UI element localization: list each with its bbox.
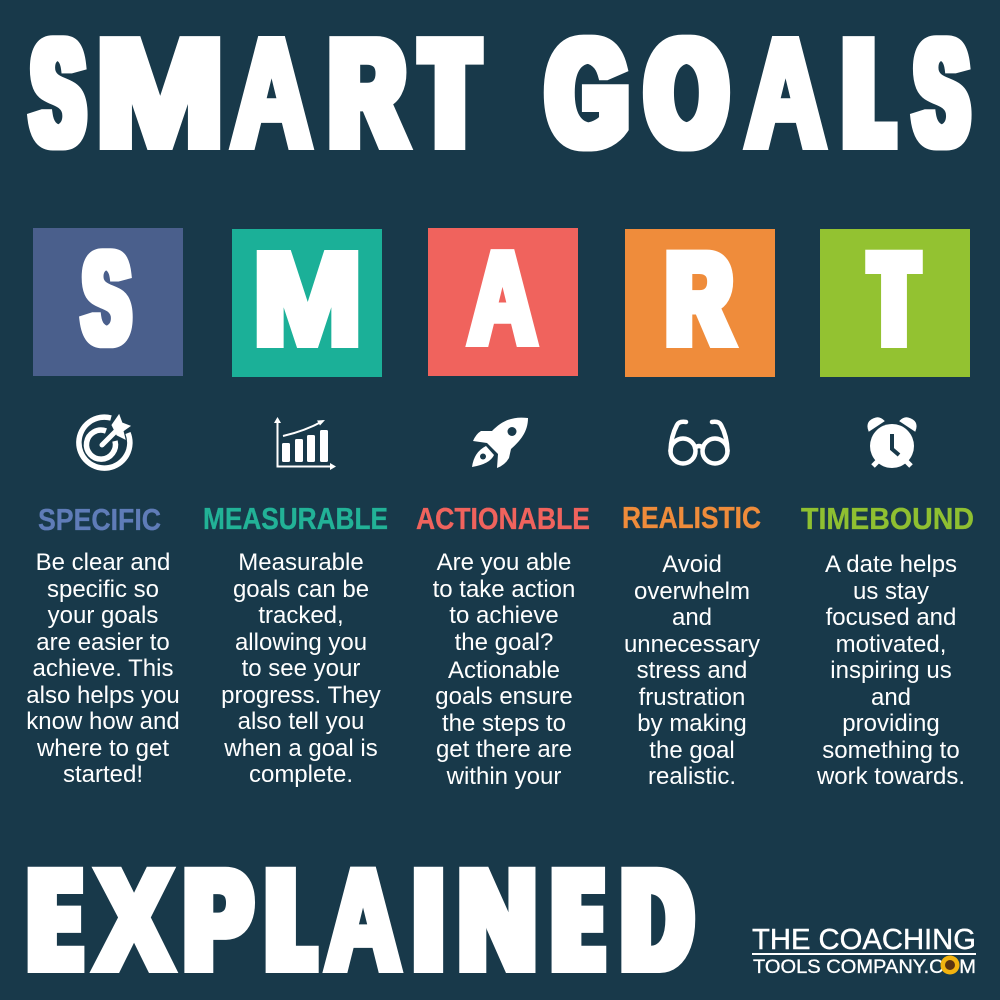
logo: The Coaching Tools Company: THE COACHING	[752, 924, 976, 956]
text block: specific description: are easier to	[36, 629, 170, 656]
text block: measurable description: when a goal is	[223, 735, 378, 762]
panel: S tile: S	[84, 225, 129, 371]
heading: EXPLAINED: D	[623, 844, 691, 997]
text block: measurable description: tracked,	[258, 602, 344, 629]
title: SMART GOALS: A	[232, 7, 311, 179]
text block: specific description: know how and	[26, 708, 180, 735]
panel: T tile: T	[872, 228, 916, 371]
logo: The Coaching Tools Company: TOOLS COMPANY.COM	[753, 957, 976, 978]
text block: timebound description: A date helps	[825, 551, 957, 578]
text block: realistic description: frustration	[639, 684, 745, 711]
heading: ACTIONABLE: ACTIONABLE	[416, 501, 590, 536]
panel: R tile: R	[667, 228, 732, 371]
heading: SPECIFIC: SPECIFIC	[38, 502, 161, 537]
heading: EXPLAINED: X	[98, 844, 170, 997]
text block: actionable description: within your	[446, 763, 561, 790]
text block: specific description	[26, 549, 180, 788]
panel: R tile	[625, 228, 775, 377]
text block: realistic description	[624, 551, 760, 790]
text block: actionable description: the goal?	[455, 629, 553, 656]
title: SMART GOALS: S	[32, 8, 83, 176]
heading: EXPLAINED: I	[411, 844, 446, 997]
panel: A tile	[428, 224, 578, 376]
text block: actionable description: Actionable	[448, 657, 560, 684]
text block: measurable description: goals can be	[233, 576, 369, 603]
heading: REALISTIC: REALISTIC	[622, 500, 761, 535]
heading: EXPLAINED: P	[185, 844, 251, 997]
text block: realistic description: unnecessary	[624, 631, 760, 658]
text block: realistic description: overwhelm	[634, 578, 750, 605]
text block: actionable description: Are you able	[437, 549, 571, 576]
text block: specific description: your goals	[48, 602, 158, 629]
panel: T tile	[820, 228, 970, 377]
title: SMART GOALS: O	[647, 11, 726, 176]
heading: TIMEBOUND: TIMEBOUND	[801, 501, 974, 536]
text block: actionable description: get there are	[436, 736, 572, 763]
text block: measurable description	[221, 549, 381, 788]
text block: measurable description: Measurable	[238, 549, 364, 576]
text block: realistic description: and	[672, 604, 712, 631]
text block: realistic description: the goal	[649, 737, 735, 764]
title: SMART GOALS: A	[746, 7, 825, 179]
title: SMART GOALS: M	[96, 11, 224, 176]
text block: measurable description: complete.	[249, 761, 353, 788]
heading: MEASURABLE: MEASURABLE	[203, 501, 388, 536]
text block: specific description: also helps you	[26, 682, 180, 709]
title: SMART GOALS	[32, 7, 967, 179]
icon: target	[79, 415, 130, 468]
heading: EXPLAINED: A	[326, 841, 400, 1000]
text block: timebound description	[816, 551, 965, 790]
text block: measurable description: also tell you	[238, 708, 364, 735]
panel: S tile	[33, 225, 183, 376]
icon: bar chart	[274, 417, 336, 470]
text block: timebound description: work towards.	[816, 763, 965, 790]
text block: timebound description: providing	[842, 710, 940, 737]
icon: rocket	[472, 418, 528, 468]
text block: specific description: where to get	[36, 735, 169, 762]
logo: The Coaching Tools Company	[752, 924, 976, 978]
text block: specific description: specific so	[47, 576, 159, 603]
text block: timebound description: us stay	[853, 578, 929, 605]
icon: alarm clock	[868, 418, 916, 468]
text block: realistic description: stress and	[637, 657, 747, 684]
heading: EXPLAINED: N	[459, 844, 536, 997]
icon: glasses	[670, 422, 728, 464]
text block: actionable description: goals ensure	[435, 683, 573, 710]
text block: timebound description: something to	[822, 737, 960, 764]
heading: EXPLAINED: E	[33, 844, 77, 997]
text block: specific description: Be clear and	[36, 549, 170, 576]
title: SMART GOALS: R	[331, 11, 404, 176]
heading: EXPLAINED	[33, 841, 691, 1000]
icon: sunflower	[940, 956, 960, 974]
text block: realistic description: Avoid	[662, 551, 722, 578]
text block: measurable description: progress. They	[221, 682, 381, 709]
text block: timebound description: and	[871, 684, 911, 711]
title: SMART GOALS: G	[548, 11, 627, 176]
text block: measurable description: to see your	[242, 655, 360, 682]
text block: specific description: achieve. This	[33, 655, 173, 682]
text block: realistic description: by making	[637, 710, 747, 737]
text block: timebound description: motivated,	[836, 631, 946, 658]
text block: actionable description: to take action	[433, 576, 575, 603]
text block: timebound description: inspiring us	[830, 657, 952, 684]
text block: actionable description: the steps to	[442, 710, 566, 737]
text block: actionable description	[433, 549, 575, 790]
text block: actionable description: to achieve	[449, 602, 559, 629]
heading: EXPLAINED: L	[272, 844, 310, 997]
text block: timebound description: focused and	[826, 604, 956, 631]
text block: realistic description: realistic.	[648, 763, 736, 790]
panel: M tile	[232, 228, 382, 377]
panel: M tile: M	[253, 228, 362, 371]
panel: A tile: A	[468, 224, 536, 372]
title: SMART GOALS: T	[425, 11, 475, 176]
heading: EXPLAINED: E	[558, 844, 598, 997]
title: SMART GOALS: L	[850, 11, 888, 176]
text block: specific description: started!	[63, 761, 143, 788]
text block: measurable description: allowing you	[235, 629, 367, 656]
